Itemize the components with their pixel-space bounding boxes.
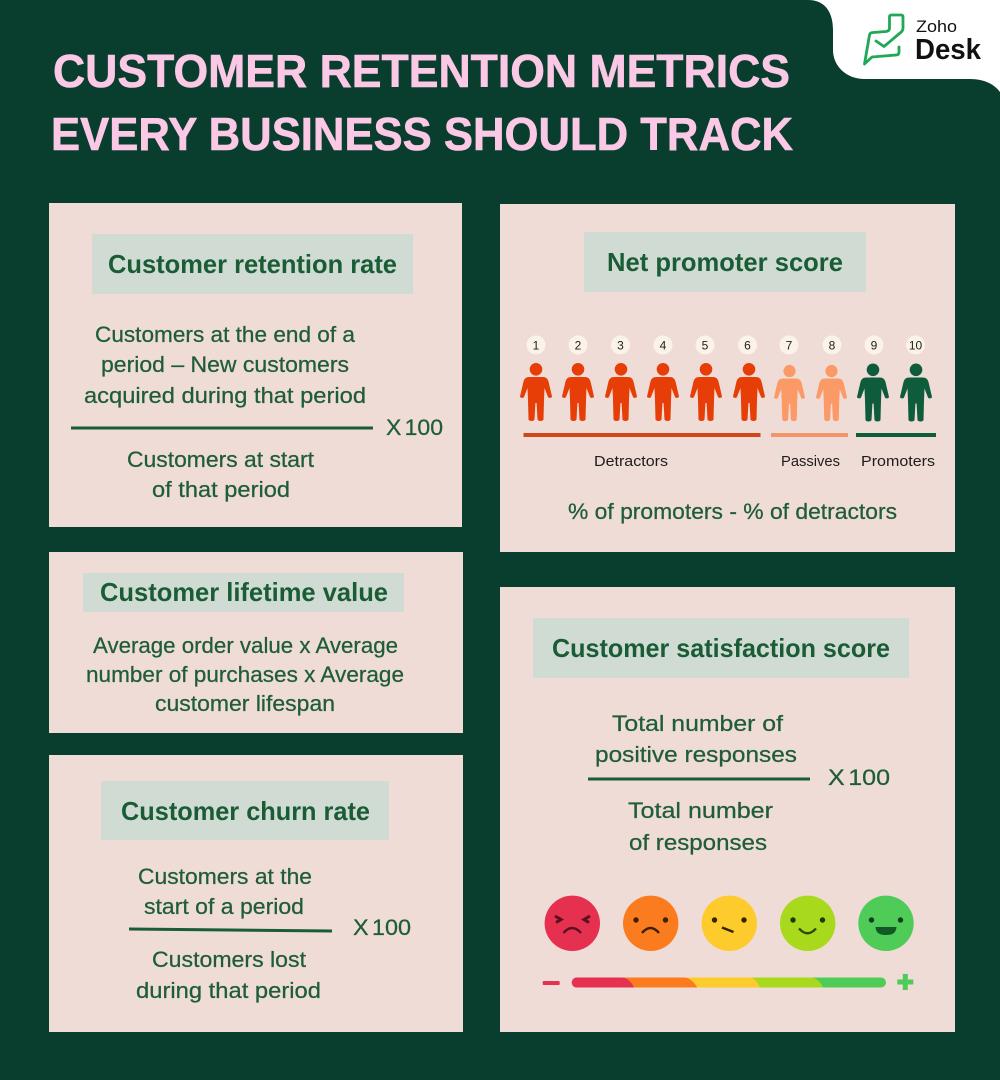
heading: net promoter score: Net promoter score — [607, 247, 843, 277]
formula: customer lifetime value: Average order value x Average — [93, 633, 398, 658]
panel: customer churn rate — [49, 755, 463, 1032]
number badges 1 to 10: 5 — [702, 338, 709, 352]
panel: customer retention rate — [49, 203, 462, 527]
number badges 1 to 10: 3 — [617, 338, 624, 352]
formula: customer lifetime value: customer lifespan — [155, 691, 335, 716]
icon: smiling face — [780, 896, 835, 951]
number badges 1 to 10: 7 — [786, 338, 793, 352]
segment labels — [594, 454, 935, 470]
panel: net promoter score — [500, 204, 955, 552]
heading: customer lifetime value: Customer lifetime value — [100, 577, 388, 607]
formula: customer retention rate: Customers at the end of a — [95, 322, 356, 347]
title: EVERY BUSINESS SHOULD TRACK — [51, 108, 793, 160]
icon: angry face — [545, 896, 600, 951]
segment labels: Passives — [781, 454, 840, 470]
icons: promoter people — [857, 364, 932, 422]
formula: customer retention rate — [71, 322, 443, 502]
heading: customer churn rate: Customer churn rate — [121, 796, 370, 826]
icons: detractor people — [520, 363, 765, 421]
formula: net promoter score: % of promoters - % of detractors — [568, 499, 897, 524]
formula: customer lifetime value — [86, 633, 404, 716]
formula: customer churn rate: Customers at the — [138, 864, 312, 889]
icons: passive people — [774, 365, 847, 421]
formula: customer churn rate: during that period — [136, 978, 321, 1003]
number badges 1 to 10 — [526, 336, 925, 354]
formula: customer lifetime value: number of purchases x Average — [86, 662, 404, 687]
heading: customer retention rate — [92, 234, 413, 294]
formula: customer satisfaction score: Total number — [628, 798, 773, 823]
logo: Zoho Desk: Desk — [915, 34, 982, 66]
segment labels: Detractors — [594, 454, 668, 470]
logo: Zoho Desk — [808, 0, 1000, 92]
number badges 1 to 10: 6 — [744, 338, 751, 352]
segment labels: Promoters — [861, 454, 935, 470]
heading: customer satisfaction score — [533, 618, 909, 678]
icon: neutral face — [702, 896, 757, 951]
formula: customer satisfaction score — [588, 711, 890, 855]
formula: customer satisfaction score: Total number of — [612, 711, 784, 736]
formula: customer retention rate: acquired during that period — [84, 383, 366, 408]
formula: customer satisfaction score: X 100 — [828, 765, 890, 790]
number badges 1 to 10: 2 — [575, 338, 582, 352]
number badges 1 to 10: 8 — [829, 338, 836, 352]
number badges 1 to 10: 1 — [533, 338, 540, 352]
panel: customer lifetime value — [49, 552, 463, 733]
number badges 1 to 10: 10 — [909, 338, 922, 352]
heading: customer churn rate — [101, 781, 389, 840]
formula: customer churn rate: X 100 — [353, 915, 411, 940]
heading: customer satisfaction score: Customer satisfaction score — [552, 633, 890, 663]
formula: customer retention rate: of that period — [152, 477, 290, 502]
title: CUSTOMER RETENTION METRICS — [53, 45, 790, 97]
formula: customer retention rate: X 100 — [386, 415, 443, 440]
formula: customer retention rate: period – New customers — [101, 352, 349, 377]
formula: customer churn rate: Customers lost — [152, 947, 306, 972]
formula: customer satisfaction score: positive responses — [595, 742, 797, 767]
formula: customer churn rate: start of a period — [144, 894, 304, 919]
icon: happy face — [858, 896, 914, 951]
heading: customer retention rate: Customer retention rate — [108, 249, 397, 279]
formula: customer churn rate — [129, 864, 411, 1003]
satisfaction scale — [543, 974, 913, 990]
number badges 1 to 10: 4 — [660, 338, 667, 352]
formula: customer retention rate: Customers at start — [127, 447, 314, 472]
title — [51, 45, 793, 160]
formula: customer satisfaction score: of responses — [629, 830, 767, 855]
panel: customer satisfaction score — [500, 587, 955, 1032]
number badges 1 to 10: 9 — [871, 338, 878, 352]
logo: Zoho Desk: Zoho — [916, 17, 957, 36]
heading: net promoter score — [584, 232, 866, 292]
icon: sad face — [623, 896, 678, 951]
segment bars — [524, 433, 936, 437]
